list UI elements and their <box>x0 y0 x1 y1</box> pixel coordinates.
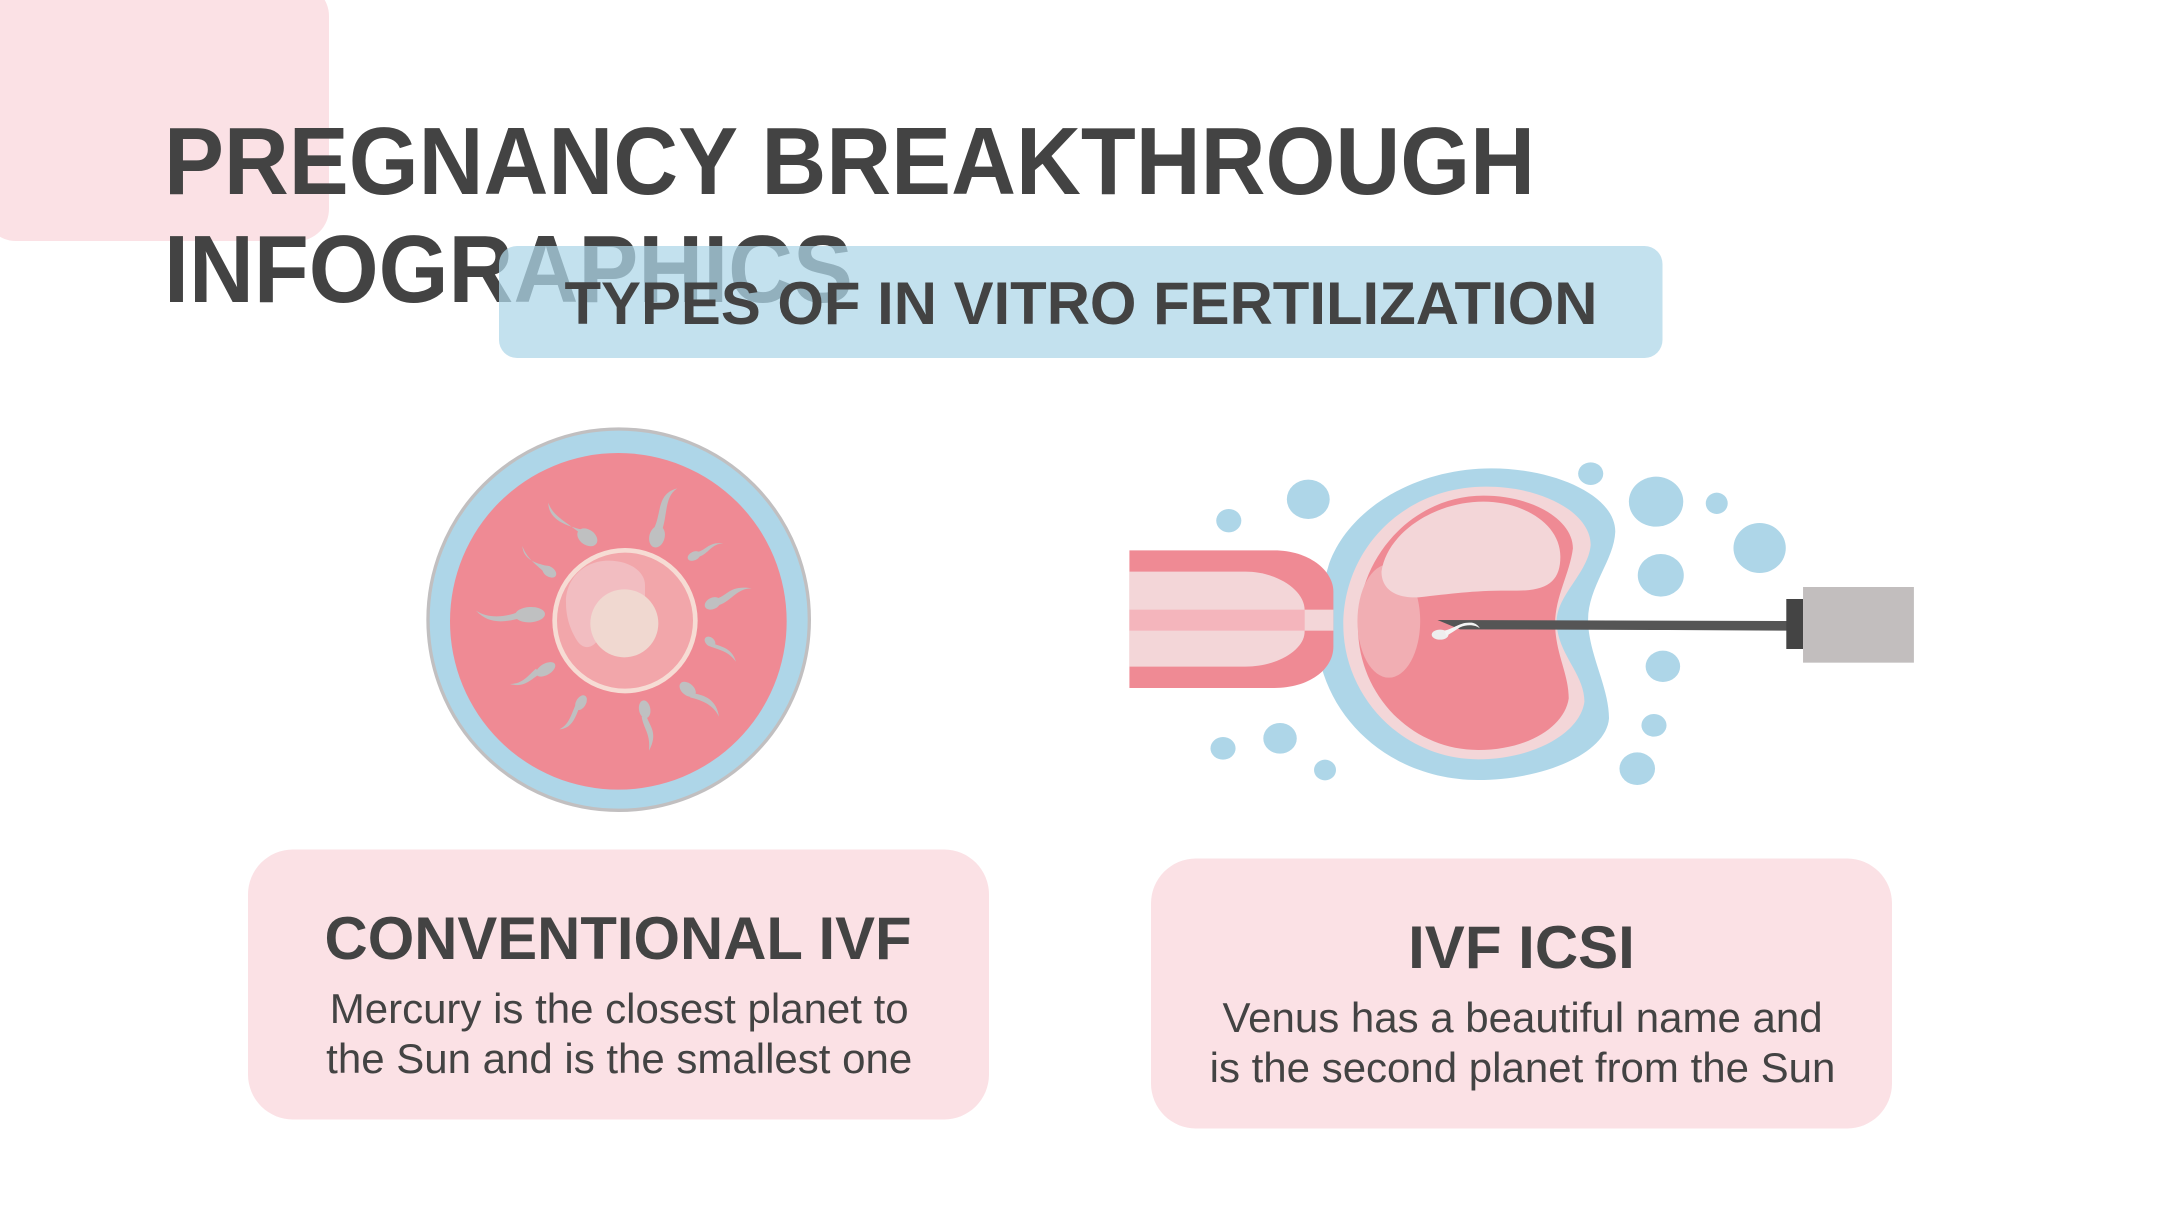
illustration: IVF ICSI injection <box>1129 462 1914 785</box>
card: conventional IVF: Mercury is the closest planet to <box>330 985 909 1032</box>
decorative pink corner panel <box>0 0 329 241</box>
card: conventional IVF: CONVENTIONAL IVF <box>324 905 912 972</box>
card: IVF ICSI: IVF ICSI <box>1408 914 1635 981</box>
card: IVF ICSI: is the second planet from the Sun <box>1210 1044 1835 1091</box>
title: INFOGRAPHICS <box>164 216 853 323</box>
illustration: conventional IVF egg with sperm <box>428 429 809 810</box>
title: PREGNANCY BREAKTHROUGH <box>164 108 1535 215</box>
title <box>164 108 1535 323</box>
subtitle banner: TYPES OF IN VITRO FERTILIZATION <box>564 270 1598 337</box>
card: conventional IVF: the Sun and is the smallest one <box>326 1035 912 1082</box>
card: IVF ICSI <box>1151 858 1892 1128</box>
subtitle banner <box>499 246 1662 358</box>
card: IVF ICSI: Venus has a beautiful name and <box>1222 994 1823 1041</box>
card: conventional IVF <box>248 850 989 1120</box>
